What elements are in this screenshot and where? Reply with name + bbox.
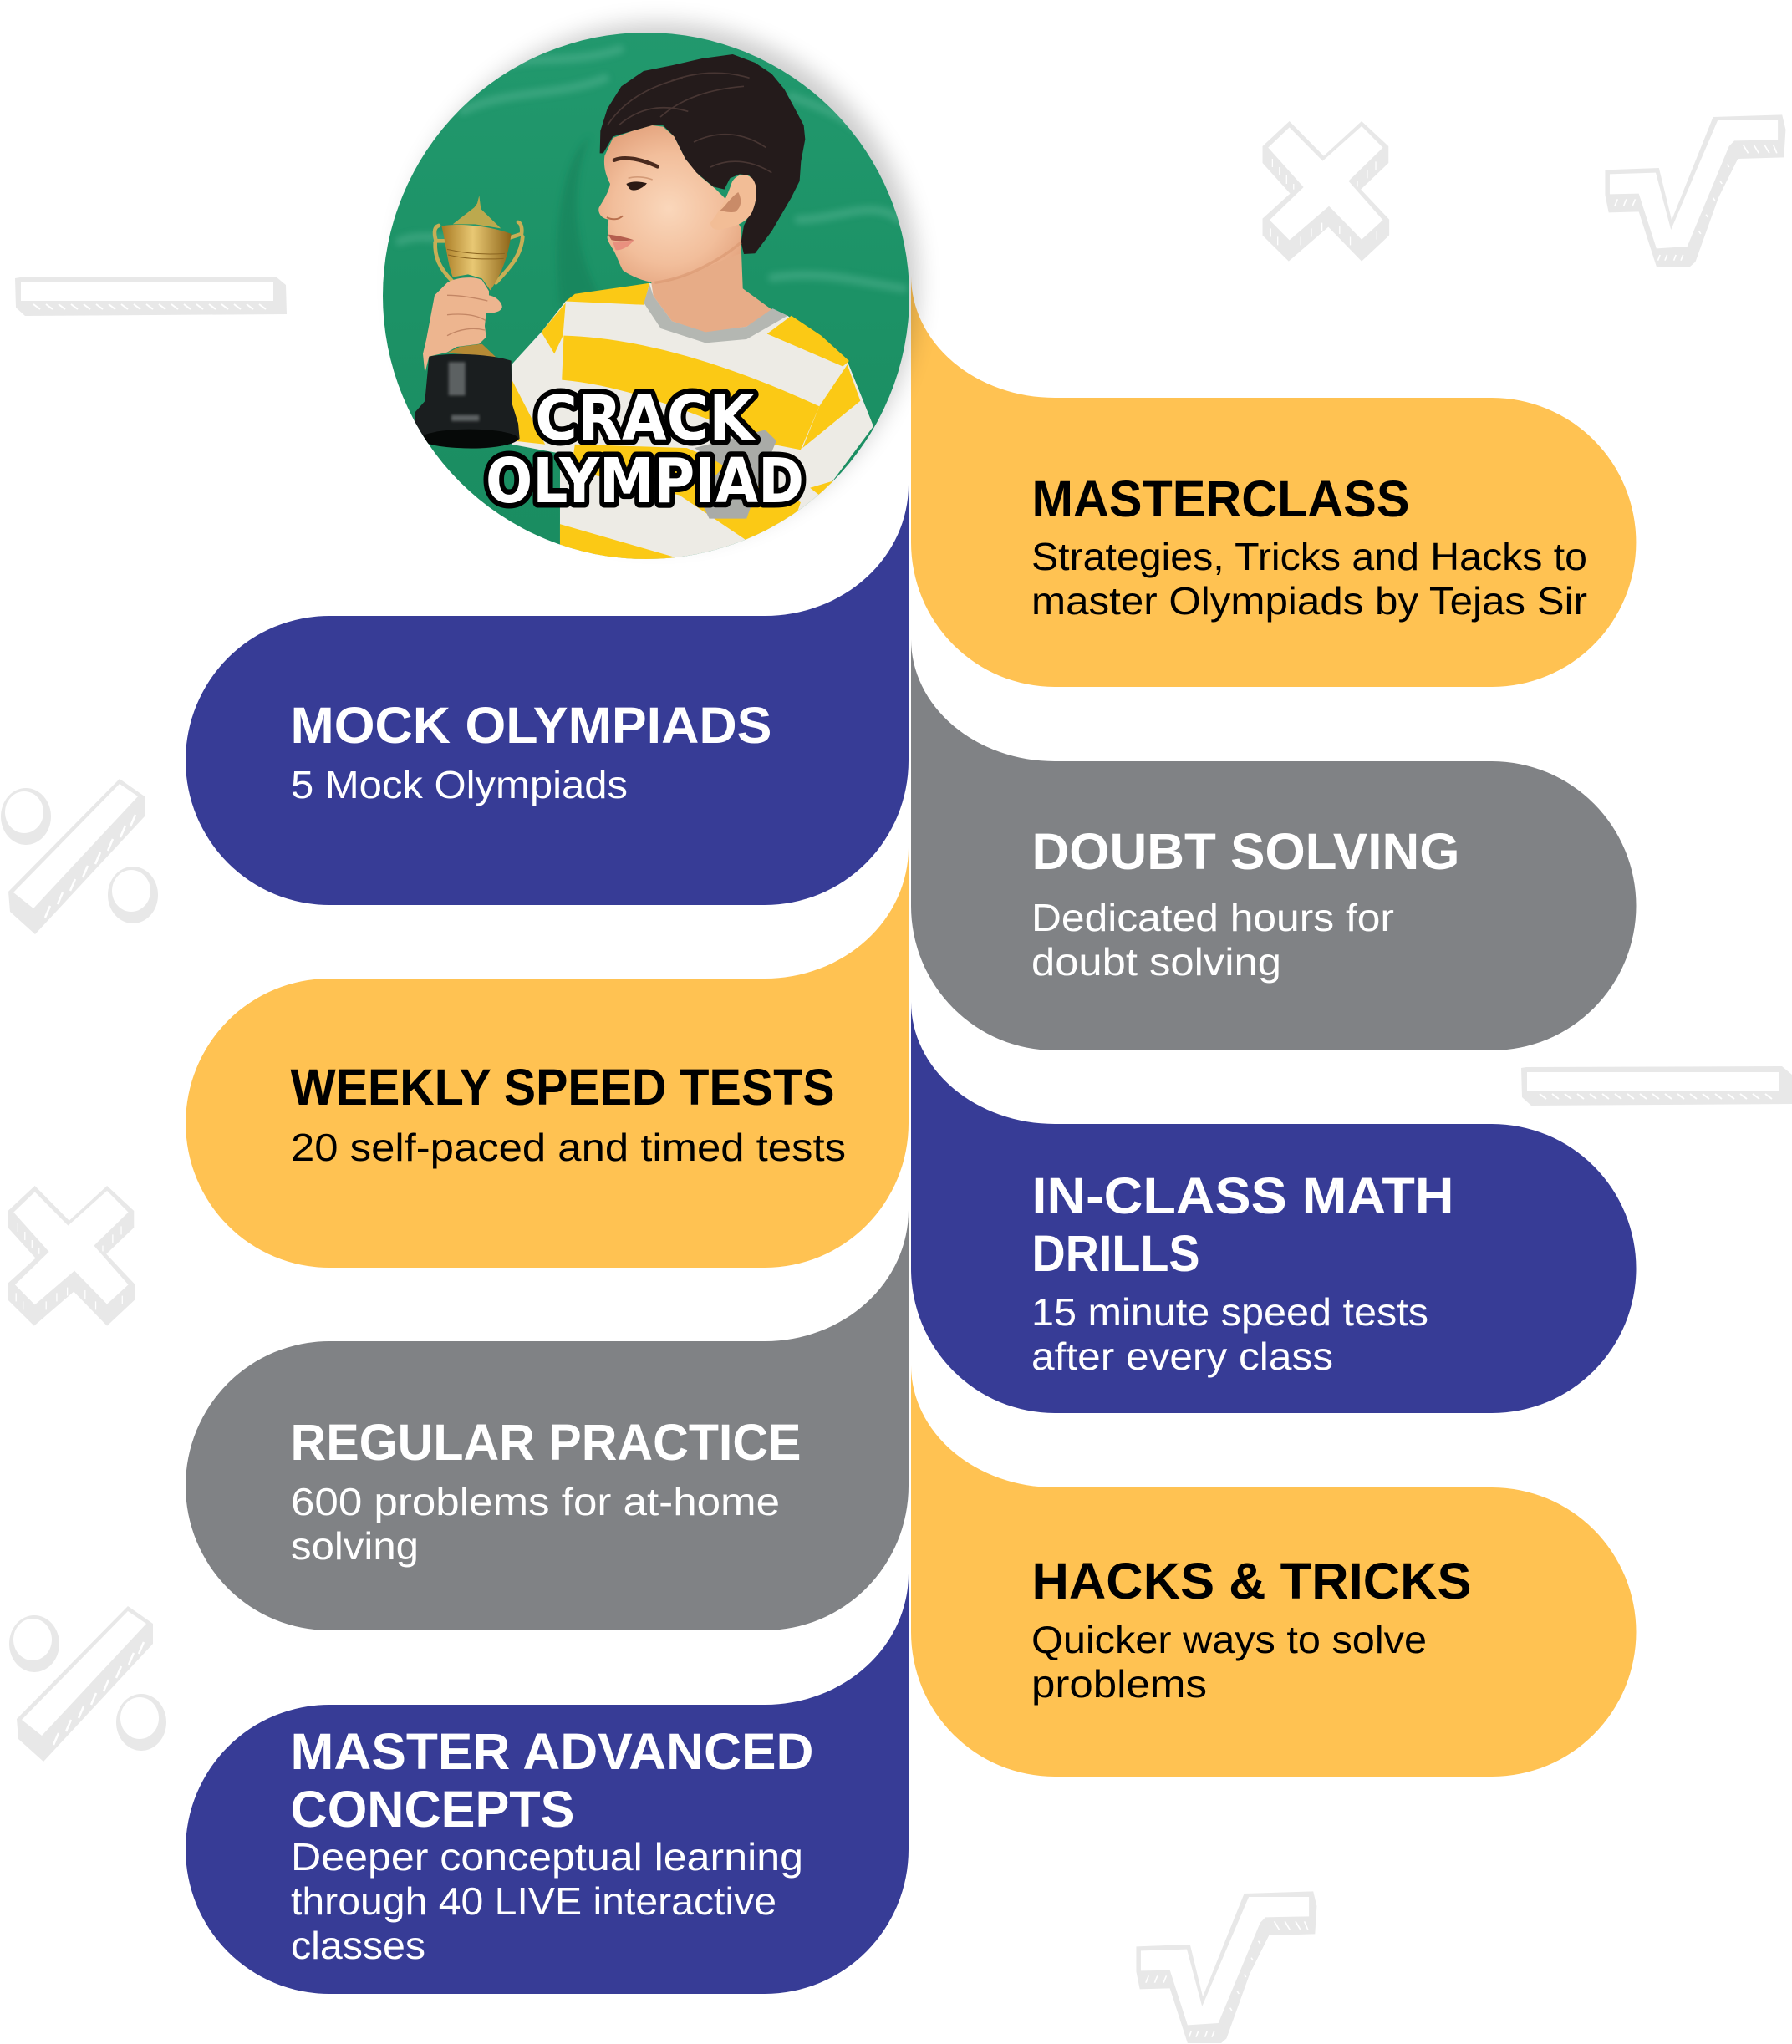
description: hacks and tricks: problems bbox=[1031, 1662, 1207, 1706]
eyebrow bbox=[614, 158, 658, 166]
ear bbox=[710, 175, 756, 230]
description: regular practice: 600 problems for at-home bbox=[291, 1480, 780, 1523]
panel shape: hacks and tricks bbox=[911, 1365, 1637, 1777]
heading: masterclass: MASTERCLASS bbox=[1031, 470, 1409, 527]
heading: in-class math drills: DRILLS bbox=[1031, 1225, 1200, 1282]
panel shape: in-class math drills bbox=[911, 1002, 1637, 1413]
hair highlights bbox=[608, 73, 771, 173]
trophy and hand bbox=[414, 196, 522, 449]
trophy base underside bbox=[420, 430, 518, 448]
description: regular practice: solving bbox=[291, 1524, 419, 1568]
title: crack olympiad: CRACK bbox=[535, 383, 756, 455]
hero: circular photo of boy with trophy and title bbox=[368, 17, 928, 577]
panel: mock olympiads bbox=[186, 485, 909, 905]
panel shape: masterclass bbox=[911, 276, 1636, 687]
eye bbox=[626, 181, 647, 191]
head: hair, face and ear bbox=[598, 54, 805, 282]
description: master advanced concepts: through 40 LIVE interactive bbox=[291, 1879, 776, 1923]
panel: doubt solving bbox=[911, 639, 1637, 1050]
t-shirt pocket bbox=[695, 430, 776, 519]
panel shape: regular practice bbox=[186, 1210, 909, 1630]
description: in-class math drills: after every class bbox=[1031, 1335, 1333, 1378]
decorative math symbol: percent lower left bbox=[9, 1606, 166, 1762]
panel: hacks and tricks bbox=[911, 1365, 1637, 1777]
decorative math symbol: multiply left bbox=[8, 1186, 135, 1326]
decorative math symbol: percent upper left bbox=[1, 779, 158, 934]
panel: in-class math drills bbox=[911, 1002, 1637, 1413]
chalkboard shadow behind boy bbox=[558, 150, 593, 302]
heading: master advanced concepts: CONCEPTS bbox=[291, 1781, 575, 1838]
heading: master advanced concepts: MASTER ADVANCED bbox=[291, 1723, 814, 1780]
panel: master advanced concepts bbox=[186, 1574, 909, 1994]
description: doubt solving: doubt solving bbox=[1031, 940, 1281, 984]
t-shirt base bbox=[512, 283, 873, 575]
description: master advanced concepts: Deeper conceptual learning bbox=[291, 1835, 803, 1879]
description: in-class math drills: 15 minute speed tests bbox=[1031, 1290, 1428, 1334]
heading: in-class math drills: IN-CLASS MATH bbox=[1031, 1167, 1454, 1224]
heading: regular practice: REGULAR PRACTICE bbox=[291, 1414, 801, 1471]
nose shadow bbox=[607, 216, 623, 219]
description: weekly speed tests: 20 self-paced and timed tests bbox=[291, 1126, 846, 1169]
decorative math symbol: square root top right bbox=[1605, 114, 1785, 267]
trophy lid bbox=[453, 196, 501, 228]
heading: mock olympiads: MOCK OLYMPIADS bbox=[291, 697, 772, 754]
description: mock olympiads: 5 Mock Olympiads bbox=[291, 763, 628, 806]
hand bbox=[423, 277, 502, 374]
decorative math symbol: multiply top right bbox=[1262, 121, 1389, 262]
panel shape: mock olympiads bbox=[186, 485, 909, 905]
jaw shadow bbox=[654, 242, 741, 282]
heading: hacks and tricks: HACKS & TRICKS bbox=[1031, 1553, 1471, 1609]
panel shape: master advanced concepts bbox=[186, 1574, 909, 1994]
trophy base bbox=[414, 354, 520, 449]
description: masterclass: master Olympiads by Tejas Sir bbox=[1031, 579, 1587, 623]
panel: weekly speed tests bbox=[186, 847, 909, 1268]
trophy handles bbox=[435, 222, 522, 282]
decorative math symbol: minus sign right bbox=[1521, 1066, 1792, 1106]
lips bbox=[608, 235, 634, 241]
trophy stem bbox=[447, 344, 496, 357]
description: master advanced concepts bbox=[291, 1835, 803, 1967]
description: masterclass bbox=[1031, 535, 1587, 623]
finger lines bbox=[447, 295, 487, 336]
description: hacks and tricks: Quicker ways to solve bbox=[1031, 1618, 1427, 1661]
description: masterclass: Strategies, Tricks and Hacks to bbox=[1031, 535, 1587, 578]
heading: in-class math drills bbox=[1031, 1167, 1454, 1282]
description: master advanced concepts: classes bbox=[291, 1924, 425, 1967]
panel: masterclass bbox=[911, 276, 1636, 687]
description: hacks and tricks bbox=[1031, 1618, 1427, 1706]
circle shadow bbox=[400, 23, 918, 542]
description: in-class math drills bbox=[1031, 1290, 1428, 1378]
face bbox=[598, 125, 741, 282]
photo illustration: boy holding trophy on green chalkboard bbox=[383, 33, 909, 559]
heading: weekly speed tests: WEEKLY SPEED TESTS bbox=[291, 1059, 834, 1116]
panel shape: doubt solving bbox=[911, 639, 1637, 1050]
t-shirt yellow stripes bbox=[512, 283, 860, 575]
title: crack olympiad bbox=[486, 383, 804, 517]
description: doubt solving: Dedicated hours for bbox=[1031, 896, 1394, 939]
description: regular practice bbox=[291, 1480, 780, 1568]
neck bbox=[649, 242, 772, 333]
title: crack olympiad: OLYMPIAD bbox=[486, 445, 804, 517]
decorative math symbol: square root bottom bbox=[1136, 1891, 1316, 2043]
trophy cup bbox=[441, 225, 512, 290]
panel: regular practice bbox=[186, 1210, 909, 1630]
chalkboard streaks bbox=[400, 49, 904, 288]
decorative math symbol: minus sign top left bbox=[15, 277, 287, 316]
heading: doubt solving: DOUBT SOLVING bbox=[1031, 823, 1459, 880]
panel shape: weekly speed tests bbox=[186, 847, 909, 1268]
description: doubt solving bbox=[1031, 896, 1394, 984]
heading: master advanced concepts bbox=[291, 1723, 814, 1838]
trophy base highlights bbox=[449, 362, 479, 421]
hair bbox=[600, 54, 805, 254]
collar bbox=[644, 284, 787, 343]
